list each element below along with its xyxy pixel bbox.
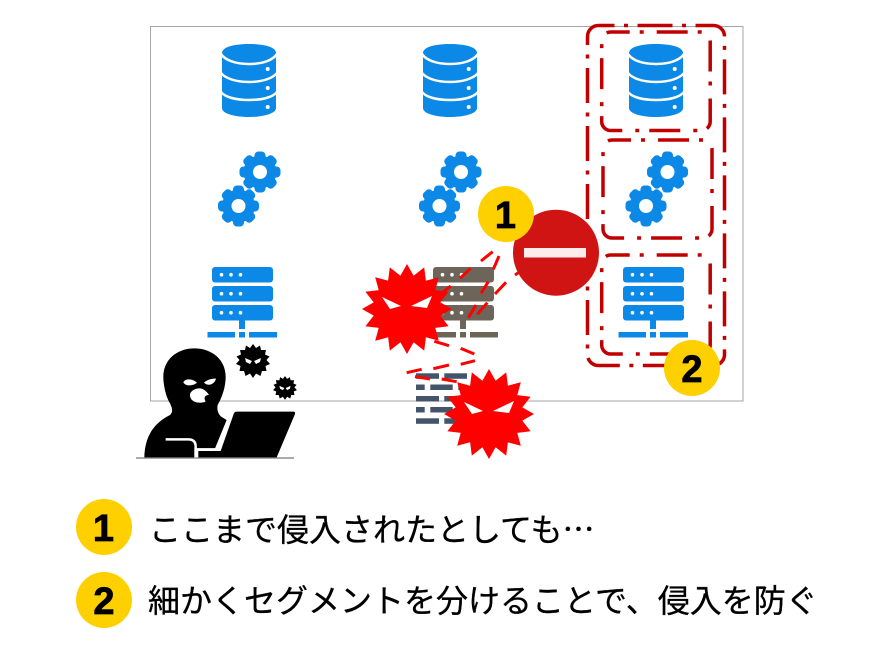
segment: database boundary [602,32,710,130]
badge: legend 1 [76,499,132,555]
icon: database column 3 [628,44,684,117]
icon: server column 3 [618,267,688,338]
icon: red attack burst on firewall [444,369,534,459]
segment: outer red dash-dot boundary [588,26,724,366]
icon: small virus large [236,344,270,378]
icon: database column 2 [422,44,478,117]
badge: legend 2: 2 [93,581,115,623]
icon: gears column 2 [419,152,482,226]
icon: server column 1 [208,267,277,338]
badge: number 1: 1 [495,195,516,237]
badge: number 2: 2 [681,349,703,391]
panel: network frame [150,26,743,401]
icon: no entry sign [513,210,599,296]
icon: small virus small [273,376,297,400]
text: legend 1: ここまで侵入されたとしても… [149,505,594,551]
icon: gears column 1 [218,152,280,226]
badge: number 1 [478,186,534,242]
badge: number 2 [664,340,720,396]
arrow: red dashed attack path [407,252,520,382]
badge: legend 1: 1 [93,508,114,550]
legend row 2 [76,572,818,628]
icon: compromised server column 2 [428,267,498,338]
icon: firewall [416,373,467,424]
badge: legend 2 [76,572,132,628]
segment: application boundary [603,140,712,238]
icon: hacker at laptop [136,348,295,458]
legend row 1 [76,499,594,555]
icon: database column 1 [221,44,277,117]
text: legend 2: 細かくセグメントを分けることで、侵入を防ぐ [148,576,818,622]
segment: server boundary [602,255,710,354]
icon: gears column 3 [626,152,688,226]
icon: red attack burst on server [362,264,452,354]
